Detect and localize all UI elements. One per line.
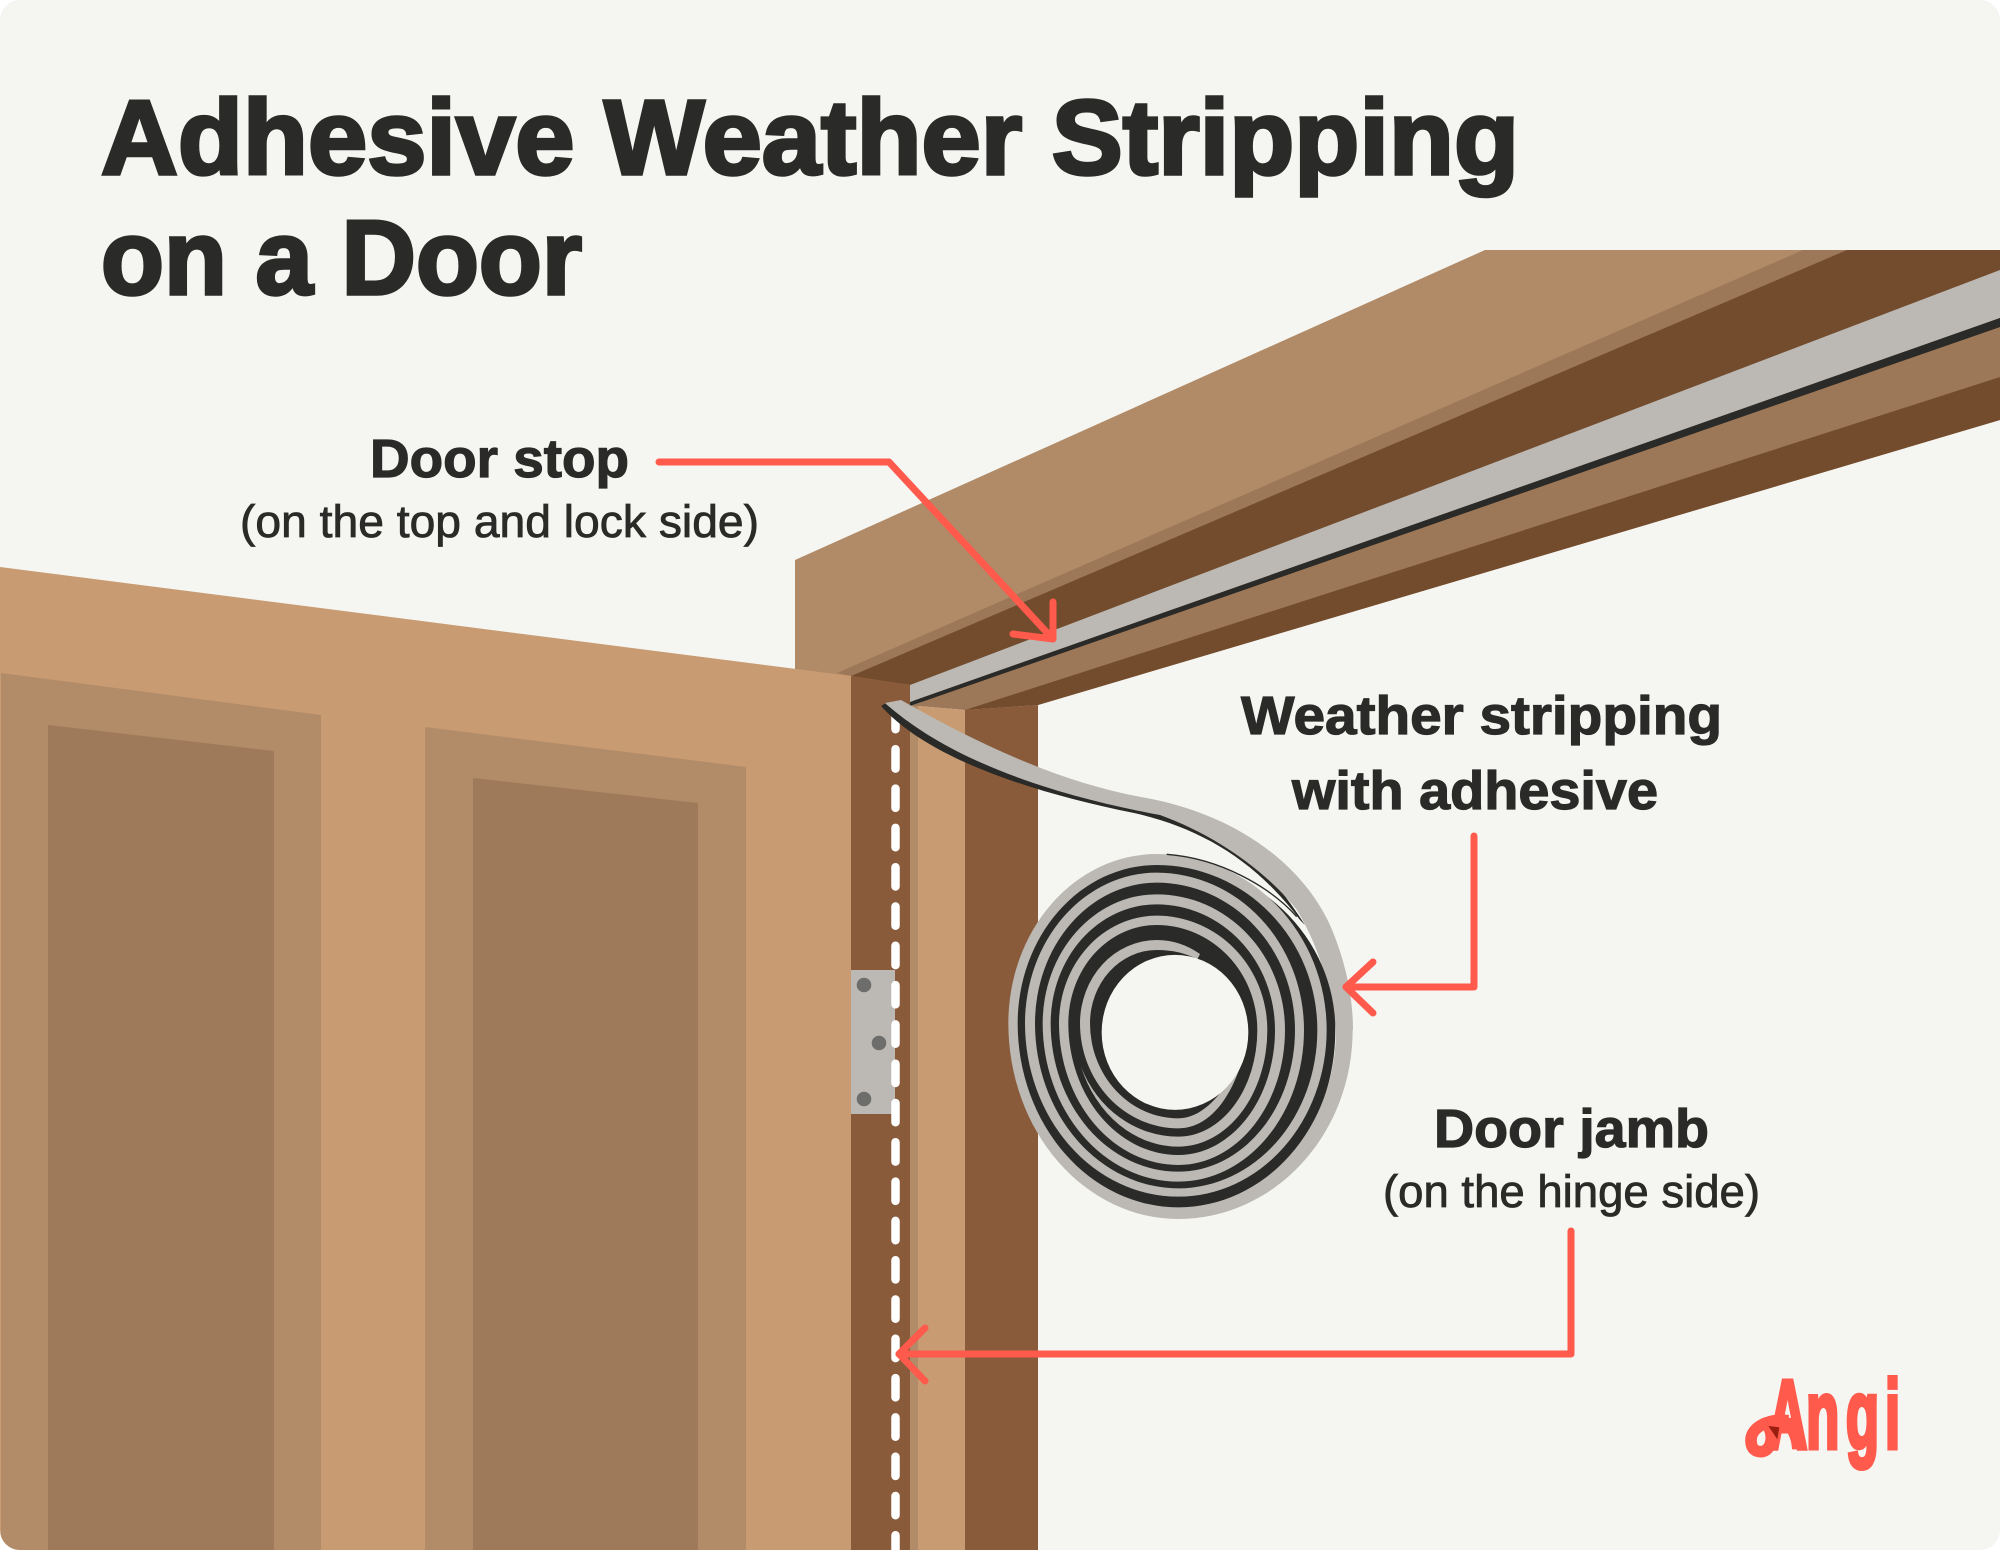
label: door stop: Door stop	[370, 429, 629, 489]
label: door jamb	[1383, 1099, 1760, 1217]
arrow: door stop	[659, 462, 1053, 639]
door frame header beam	[795, 250, 2000, 710]
title: Adhesive Weather Stripping	[101, 79, 1519, 197]
label: door jamb: (on the hinge side)	[1383, 1166, 1760, 1217]
door panel right	[425, 727, 746, 1550]
roll black backing	[1013, 860, 1335, 1213]
unrolled strip	[885, 700, 1353, 1030]
label: door stop: (on the top and lock side)	[240, 496, 759, 547]
arrow: weather stripping	[1346, 836, 1474, 1013]
door	[0, 567, 851, 1550]
roll inner tail band	[1080, 940, 1248, 1128]
title: on a Door	[101, 199, 582, 317]
hinge	[851, 970, 895, 1114]
door jamb	[851, 676, 1038, 1550]
label: door stop	[240, 429, 759, 547]
weather stripping roll	[881, 700, 1353, 1219]
unrolled strip black backing	[881, 703, 1305, 925]
label: weather stripping with adhesive: with adhesive	[1291, 761, 1658, 821]
thin black line on roll top	[1167, 854, 1297, 917]
logo: Angi: Angi	[1768, 1360, 1900, 1469]
title	[101, 79, 1519, 317]
label: door jamb: Door jamb	[1434, 1099, 1709, 1159]
door panel left	[1, 673, 321, 1550]
arrow: door jamb	[899, 1231, 1571, 1381]
roll spiral band	[1008, 854, 1353, 1219]
roll center hole	[1102, 955, 1248, 1110]
door stop weather strip	[910, 270, 2000, 706]
label: weather stripping with adhesive: Weather stripping	[1241, 686, 1722, 746]
label: weather stripping with adhesive	[1241, 686, 1722, 821]
dashed line on door jamb	[891, 706, 900, 1550]
